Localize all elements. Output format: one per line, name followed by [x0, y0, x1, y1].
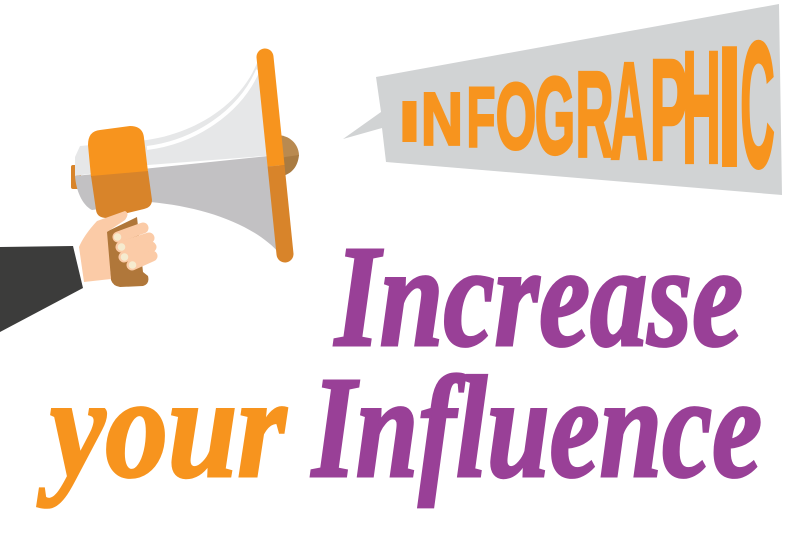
- megaphone body: [88, 126, 152, 218]
- heading: your: your: [37, 348, 287, 508]
- bubble text: INFOGRAPHIC: I: [399, 90, 420, 154]
- megaphone front dome: [278, 135, 299, 176]
- megaphone: [71, 57, 299, 254]
- speech bubble: [343, 4, 782, 205]
- bubble text: INFOGRAPHIC: H: [682, 19, 721, 197]
- bubble text: INFOGRAPHIC: G: [535, 55, 575, 178]
- bubble text: INFOGRAPHIC: [399, 4, 775, 205]
- bubble text: INFOGRAPHIC: F: [467, 71, 495, 165]
- palm and thumb: [79, 211, 128, 282]
- bubble text: INFOGRAPHIC: C: [740, 4, 775, 205]
- bubble text: INFOGRAPHIC: A: [610, 35, 648, 189]
- bubble text: INFOGRAPHIC: N: [421, 79, 463, 161]
- bubble text: INFOGRAPHIC: P: [650, 31, 688, 191]
- megaphone horn: [75, 63, 280, 254]
- sleeve: [0, 246, 83, 332]
- fingers: [118, 228, 152, 265]
- megaphone back cap: [71, 165, 81, 189]
- bubble text: INFOGRAPHIC: O: [496, 64, 536, 170]
- finger nails: [114, 233, 136, 269]
- megaphone rim: [265, 57, 285, 254]
- bubble text: INFOGRAPHIC: R: [575, 46, 614, 182]
- bubble text: INFOGRAPHIC: I: [717, 12, 742, 203]
- handle: [106, 217, 148, 287]
- hand holding megaphone: [0, 211, 152, 332]
